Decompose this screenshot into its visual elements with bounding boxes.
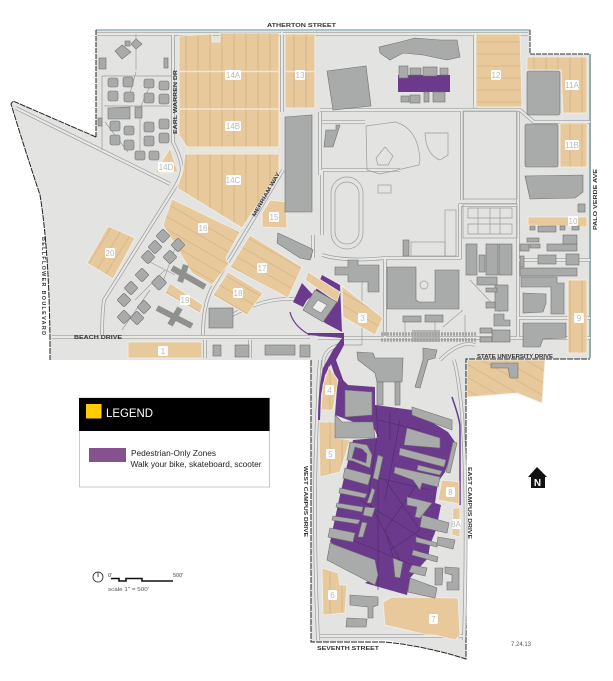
legend text: Walk your bike, skateboard, scooter: [130, 460, 262, 469]
north arrow: [528, 467, 547, 489]
legend text: Pedestrian-Only Zones: [131, 449, 216, 458]
parking lot numbers: [105, 70, 584, 624]
scale bar: [93, 572, 183, 593]
legend header: LEGEND: [106, 406, 153, 420]
street names: MERRIAM WAY: [252, 171, 282, 218]
parking lot numbers: 3: [360, 314, 365, 323]
parking lot numbers: 14D: [159, 163, 174, 172]
street names: WEST CAMPUS DRIVE: [302, 466, 308, 537]
pedestrian-only zones: [290, 75, 460, 595]
scale bar: 0': [108, 573, 112, 579]
parking lot numbers: 11B: [565, 141, 579, 150]
parking lot numbers: 9: [577, 314, 582, 323]
legend header: [79, 398, 270, 431]
parking lot numbers: 14B: [226, 122, 240, 131]
buildings: [98, 38, 585, 627]
parking lot numbers: 4: [327, 386, 332, 395]
north arrow: N: [534, 478, 541, 489]
street names: BELLFLOWER BOULEVARD: [40, 237, 46, 335]
parking lot numbers: 13: [296, 71, 305, 80]
street names: STATE UNIVERSITY DRIVE: [477, 354, 553, 360]
street names: ATHERTON STREET: [267, 23, 337, 29]
parking lot numbers: 16: [199, 224, 208, 233]
legend: [79, 398, 270, 487]
parking lot numbers: 7: [431, 615, 436, 624]
parking lot numbers: 5: [328, 450, 333, 459]
parking lot numbers: 20: [106, 249, 115, 258]
street names: PALO VERDE AVE: [593, 168, 599, 230]
parking lot numbers: 14C: [226, 176, 241, 185]
street names: SEVENTH STREET: [317, 646, 380, 652]
scale bar: scale 1" = 500': [108, 587, 149, 593]
parking lot numbers: 14A: [226, 71, 241, 80]
parking lot numbers: 8: [448, 488, 453, 497]
parking lot numbers: 15: [270, 213, 279, 222]
parking lot numbers: 8A: [451, 520, 462, 529]
parking lot numbers: 12: [492, 71, 501, 80]
scale bar: 500': [173, 573, 183, 579]
street names: EAST CAMPUS DRIVE: [466, 467, 472, 539]
parking lot numbers: 1: [161, 347, 166, 356]
parking lots: [87, 33, 587, 640]
parking lot numbers: 17: [258, 264, 267, 273]
legend swatch: pedestrian-only zones: [89, 448, 126, 462]
date stamp: 7.24.13: [511, 642, 532, 648]
parking lot numbers: 11A: [565, 81, 579, 90]
parking lot numbers: 19: [181, 296, 190, 305]
street names: EARL WARREN DR: [173, 70, 179, 134]
athletic fields: [331, 111, 517, 342]
parking lot numbers: 10: [569, 217, 578, 226]
parking lot numbers: 18: [234, 289, 243, 298]
street names: BEACH DRIVE: [74, 335, 123, 341]
dorm and campus walkways: [102, 34, 500, 345]
legend text: [130, 449, 262, 469]
parking lot numbers: 6: [330, 591, 335, 600]
